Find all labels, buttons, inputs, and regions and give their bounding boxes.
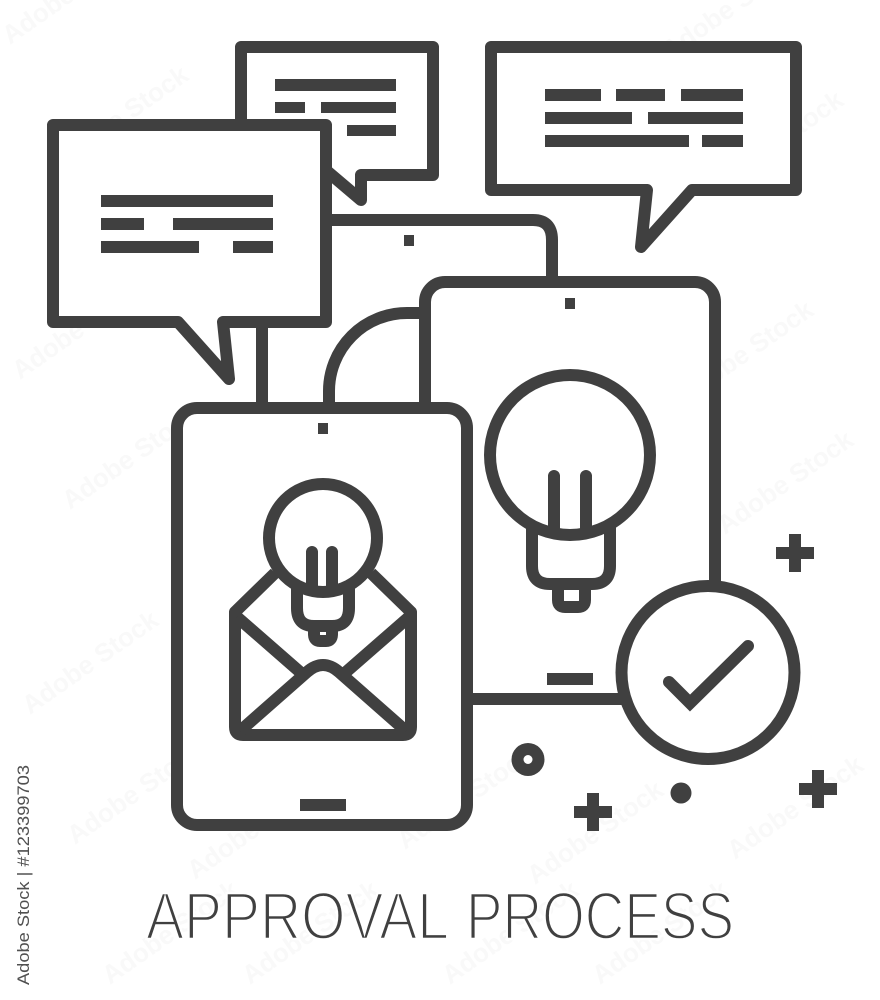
background watermark pattern: Adobe Stock: [46, 59, 194, 175]
background watermark pattern: Adobe Stock: [56, 399, 204, 515]
icon: large light bulb: [490, 375, 650, 607]
background watermark pattern: Adobe Stock: [181, 769, 329, 885]
rear tablet outline: [262, 220, 552, 404]
background watermark pattern: Adobe Stock: [436, 874, 584, 990]
stock id caption: Adobe Stock | #123399703: [15, 765, 33, 985]
background watermark pattern: Adobe Stock: [236, 874, 384, 990]
icon: small light bulb: [269, 484, 377, 641]
approval check badge: [622, 586, 794, 759]
title: PROCESS: [466, 879, 734, 954]
background watermark pattern: Adobe Stock: [96, 874, 244, 990]
speech bubble: top middle: [241, 47, 433, 200]
middle tablet with light bulb: [425, 282, 715, 699]
background watermark pattern: Adobe Stock: [61, 734, 209, 850]
background watermark pattern: Adobe Stock: [721, 749, 869, 865]
background watermark pattern: Adobe Stock: [701, 84, 849, 200]
speech bubble: left: [53, 125, 326, 379]
background watermark pattern: Adobe Stock: [391, 739, 539, 855]
speech bubble: top right: [491, 47, 796, 247]
icon: envelope: [235, 573, 411, 735]
title: [146, 879, 734, 954]
title: APPROVAL: [146, 879, 449, 954]
background watermark pattern: Adobe Stock: [671, 294, 819, 410]
background watermark pattern: Adobe Stock: [586, 874, 734, 990]
arc behind tablets: [329, 313, 427, 404]
background watermark pattern: Adobe Stock: [6, 269, 154, 385]
background watermark pattern: Adobe Stock: [521, 774, 669, 890]
rear tablet camera: [404, 235, 414, 246]
decorative plus and dots: [512, 534, 837, 831]
background watermark pattern: Adobe Stock: [16, 604, 164, 720]
front tablet with envelope: [177, 408, 467, 825]
background watermark pattern: Adobe Stock: [711, 424, 859, 540]
